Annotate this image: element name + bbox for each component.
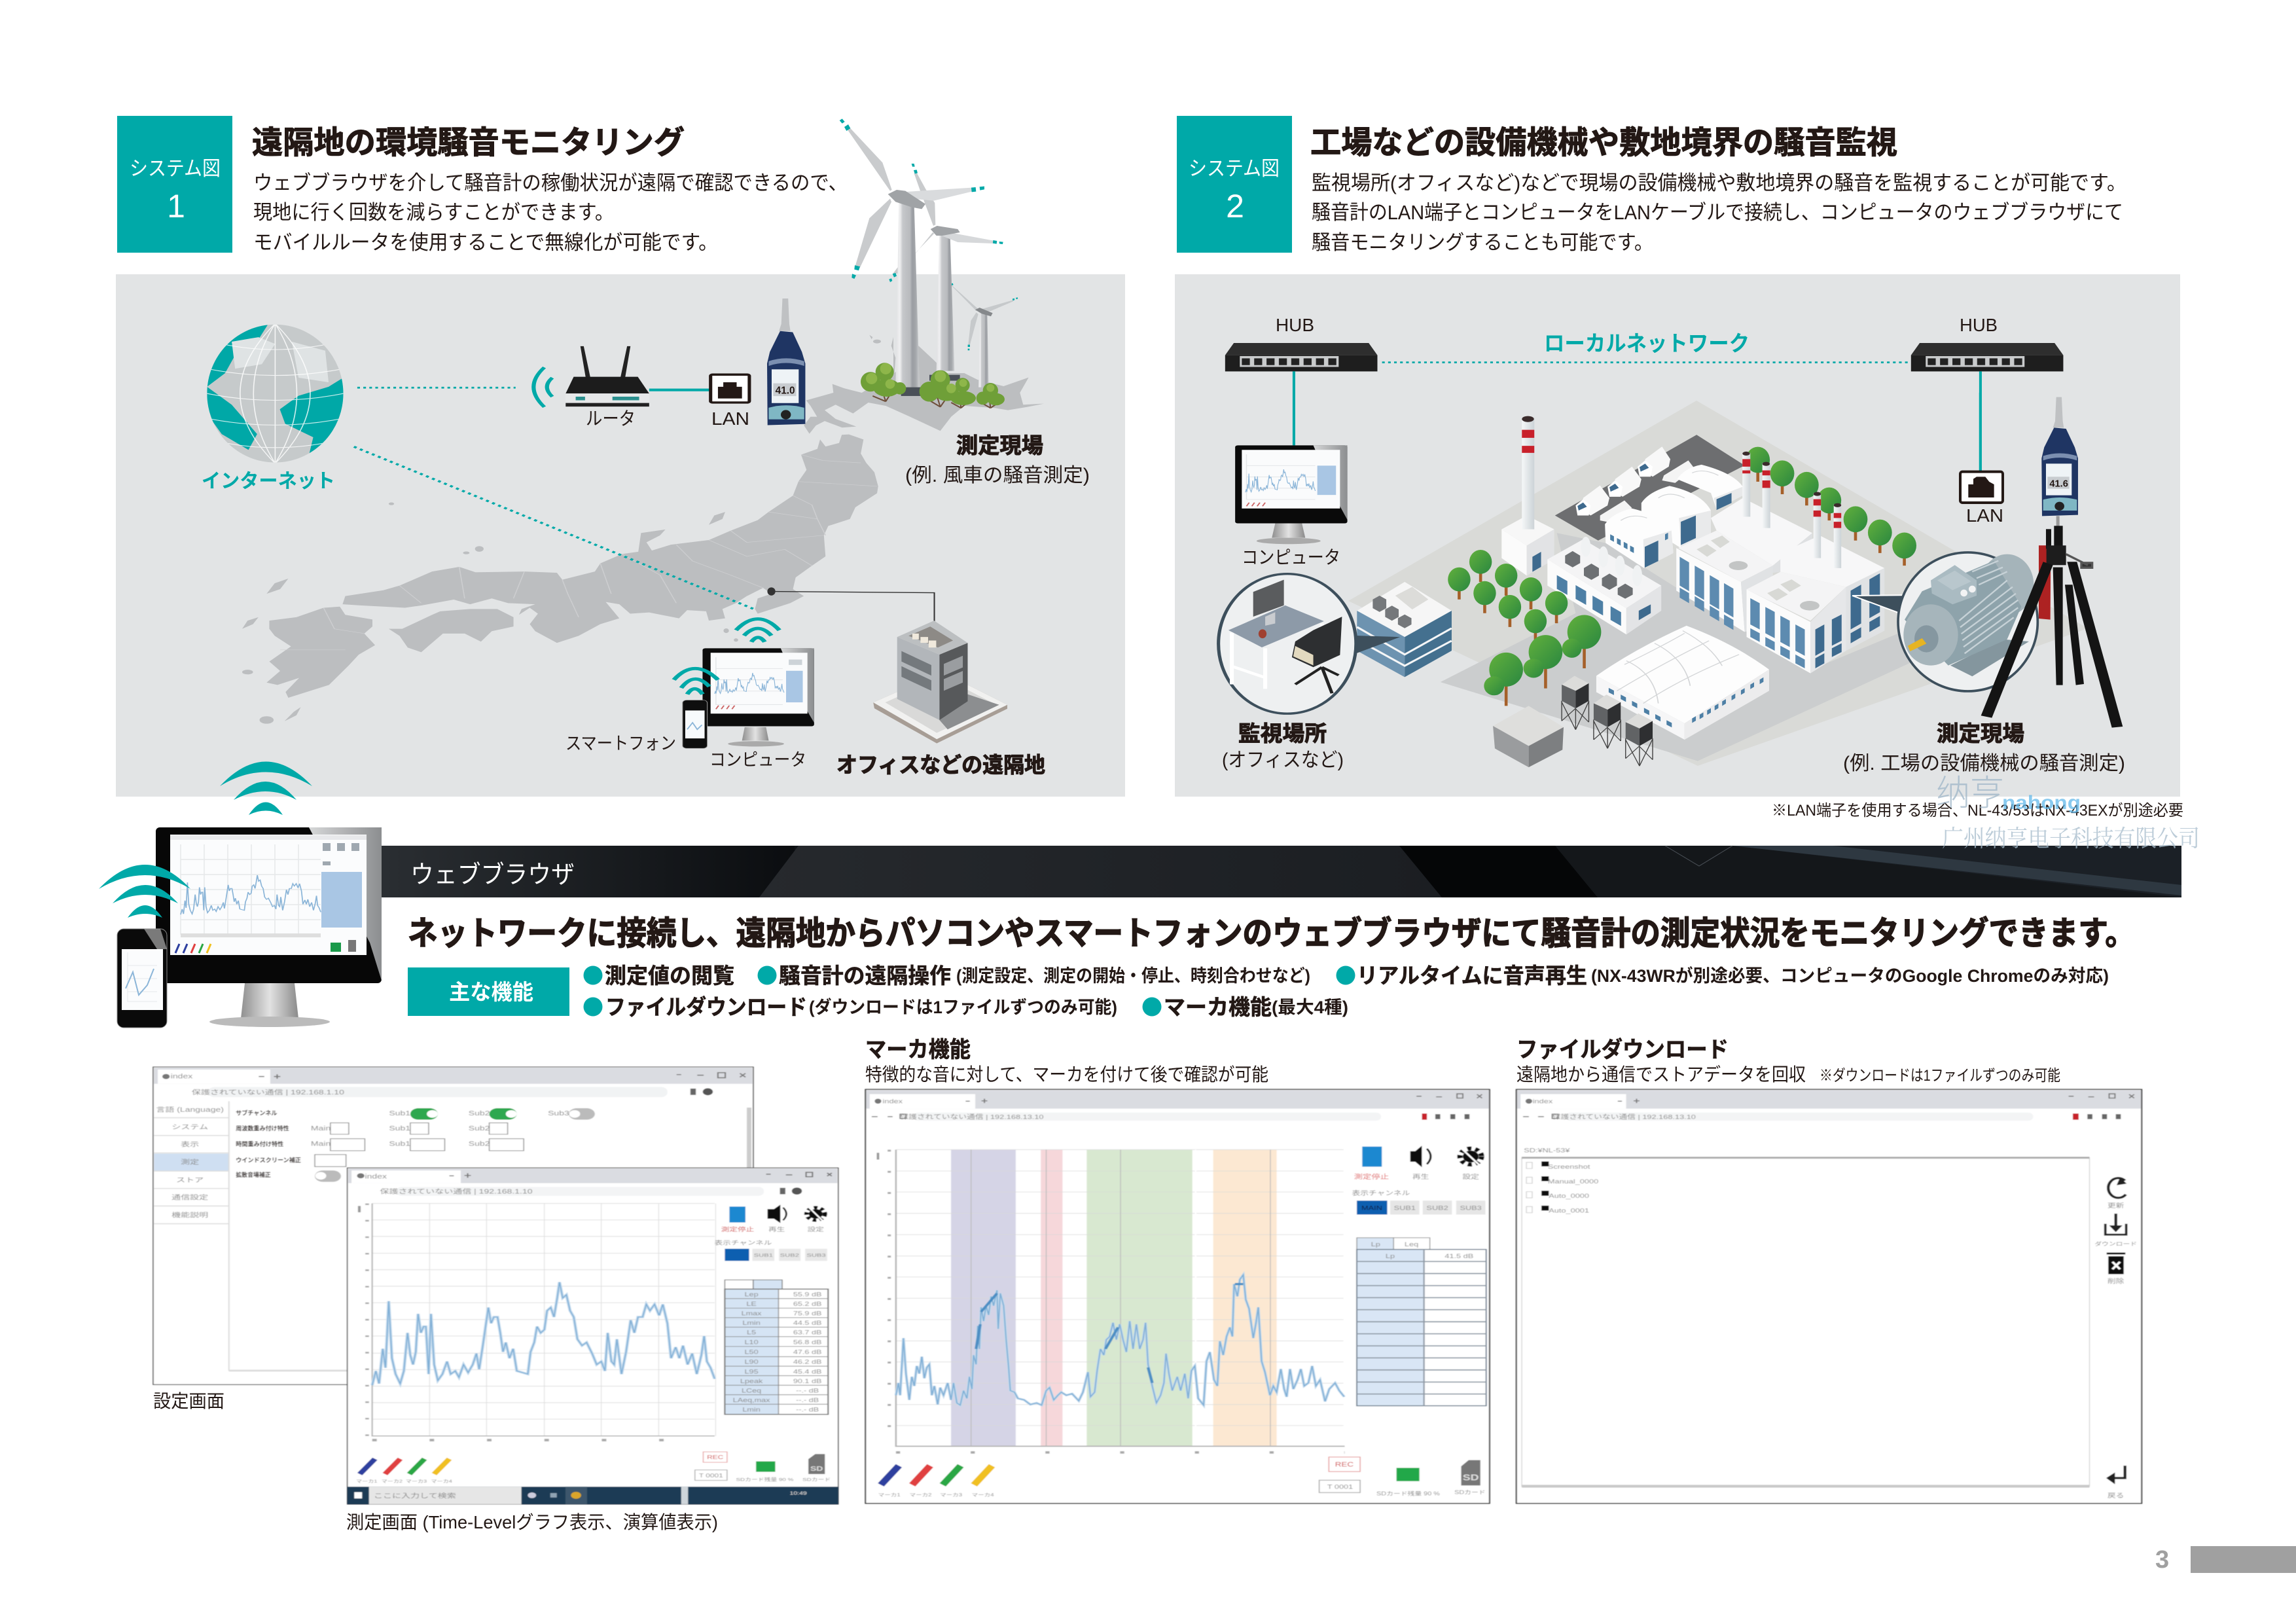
turbine 2: [889, 164, 1003, 381]
feature list: リアルタイムに音声再生: [1357, 964, 1587, 988]
watermark: [1936, 774, 2200, 852]
system 1 title: 遠隔地の環境騒音モニタリング: [252, 126, 685, 160]
callout: motor: [1852, 552, 2037, 691]
screenshot: settings window: Sub3: [548, 1110, 569, 1117]
system 2 number badge: [1177, 116, 1292, 253]
panel: system diagram 1: [116, 118, 1125, 797]
icon: monitor: [1235, 445, 1348, 544]
label: measurement site: (例. 風車の騒音測定): [905, 465, 1090, 486]
value table: 55.9 dB: [793, 1291, 821, 1298]
hubs and network line: [1225, 343, 2063, 471]
status icons: REC: [1335, 1461, 1354, 1468]
value table: --.- dB: [796, 1388, 819, 1394]
system 1 description: [253, 171, 848, 254]
screenshot: measurement window: 保護されていない通信 | 192.168.1.10: [380, 1187, 533, 1195]
page number: [2155, 1546, 2296, 1574]
japan map: [242, 335, 1044, 724]
screenshot: settings window: [153, 1067, 753, 1384]
windows taskbar: ここに入力して検索: [374, 1492, 456, 1500]
system 1 description: ウェブブラウザを介して騒音計の稼働状況が遠隔で確認できるので、: [253, 171, 848, 194]
controls: 測定停止: [1354, 1173, 1389, 1181]
status icons: SD: [810, 1465, 823, 1472]
screenshot: marker window: マーカ4: [972, 1492, 994, 1498]
file list: Auto_0001: [1549, 1208, 1589, 1214]
screenshot: settings window: Sub2: [469, 1125, 490, 1132]
label: local network: ローカルネットワーク: [1544, 331, 1749, 355]
screenshot: settings window: ストア: [176, 1176, 204, 1183]
main functions badge: 主な機能: [449, 980, 533, 1004]
controls: 設定: [1462, 1174, 1479, 1181]
value table: L5: [747, 1329, 756, 1336]
value table: 56.8 dB: [793, 1339, 821, 1346]
screenshot: settings window: ウインドスクリーン補正: [236, 1157, 301, 1164]
watermark: 纳亨: [1936, 774, 2004, 813]
block A: [1547, 537, 1661, 634]
screenshot: settings window: 測定: [181, 1159, 199, 1166]
block B rear: [1676, 530, 1773, 632]
feature list: 測定値の閲覧: [605, 964, 734, 988]
feature list: (ダウンロードは1ファイルずつのみ可能): [809, 997, 1117, 1017]
status icons: SDカード: [802, 1477, 831, 1482]
label: hub right: HUB: [1960, 315, 1998, 335]
windows taskbar: [348, 1487, 838, 1504]
screenshot: measurement window: [348, 1168, 838, 1504]
screenshot: measurement window: index: [365, 1173, 387, 1180]
system 2 number badge: システム図: [1189, 157, 1280, 180]
value table: 45.4 dB: [793, 1369, 821, 1375]
status icons: SDカード残量 90 %: [736, 1477, 794, 1482]
file list: Auto_0000: [1549, 1193, 1589, 1200]
screenshot: settings window: 周波数重み付け特性: [236, 1125, 289, 1132]
arched warehouses: [1605, 465, 1743, 568]
screenshot: settings window: 機能説明: [171, 1211, 208, 1219]
hub right: [1911, 343, 2063, 371]
heading: file download: ファイルダウンロード: [1516, 1037, 1729, 1062]
value table: LAeq,max: [733, 1398, 770, 1403]
main functions badge: [408, 967, 569, 1016]
connection lines: [354, 388, 935, 621]
value table: 75.9 dB: [793, 1310, 821, 1317]
illustration: factory site: [1348, 401, 2088, 767]
file action icons: [2094, 1178, 2137, 1499]
screenshot: settings window: Sub1: [389, 1110, 410, 1117]
turbine 3: [948, 281, 1018, 388]
value table: Lpeak: [740, 1379, 763, 1384]
value table: --.- dB: [796, 1398, 819, 1403]
feature list: マーカ機能: [1164, 995, 1272, 1019]
text: marker description: 特徴的な音に対して、マーカを付けて後で確認が可能: [865, 1064, 1268, 1085]
value table: Lep: [745, 1291, 759, 1298]
controls: SUB3: [1460, 1205, 1482, 1212]
small unit: [1493, 706, 1564, 767]
file list: Manual_0000: [1548, 1178, 1598, 1185]
file action icons: 更新: [2108, 1202, 2124, 1210]
trees: [1448, 550, 1601, 706]
value table: Leq: [1405, 1242, 1418, 1248]
caption: settings screen: 設定画面: [153, 1391, 224, 1411]
status icons: SDカード: [1454, 1490, 1486, 1496]
value table: 41.5 dB: [1444, 1253, 1473, 1260]
screenshot: settings window: サブチャンネル: [236, 1110, 278, 1117]
controls: 再生: [1412, 1173, 1429, 1181]
value table: 46.2 dB: [793, 1359, 821, 1365]
controls: SUB3: [806, 1252, 826, 1258]
screenshot: marker window: マーカ2: [910, 1492, 932, 1498]
time-level chart: [877, 1149, 1345, 1453]
screenshot: settings window: 言語 (Language): [156, 1106, 224, 1113]
label: measurement site: (例. 工場の設備機械の騒音測定): [1843, 753, 2125, 774]
screenshot: marker window: [865, 1089, 1490, 1504]
value table: 47.6 dB: [793, 1349, 821, 1356]
screenshot: settings window: Sub1: [389, 1140, 410, 1147]
controls: [1352, 1146, 1485, 1214]
hub left: [1225, 343, 1377, 371]
label: monitoring location: 監視場所: [1238, 721, 1327, 746]
watermark: 广州纳亨电子科技有限公司: [1942, 825, 2200, 852]
caption: measurement screen: 測定画面 (Time-Levelグラフ表示、演算値表示): [346, 1512, 718, 1532]
ground roads: [1441, 435, 1936, 761]
system 2 description: 騒音モニタリングすることも可能です。: [1312, 231, 1653, 254]
feature list: (測定設定、測定の開始・停止、時刻合わせなど): [956, 966, 1310, 986]
controls: SUB1: [754, 1252, 773, 1258]
screenshot: marker window: マーカ3: [940, 1492, 962, 1498]
note: LAN terminal: ※LAN端子を使用する場合、NL-43/53はNX-43EXが別途必要: [1772, 802, 2183, 820]
feature list: (最大4種): [1272, 998, 1348, 1017]
screenshot: measurement window: マーカ3: [406, 1479, 427, 1484]
controls: 再生: [768, 1225, 785, 1233]
label: smartphone: スマートフォン: [565, 734, 676, 753]
label: internet: インターネット: [202, 471, 335, 492]
icon: office building: [873, 621, 1007, 744]
controls: 測定停止: [721, 1225, 754, 1233]
file action icons: 戻る: [2108, 1492, 2124, 1499]
value table: Lmin: [742, 1407, 761, 1413]
rear tree row: [1746, 447, 1916, 566]
icon: large monitor: [156, 827, 382, 1027]
system 2 description: 騒音計のLAN端子とコンピュータをLANケーブルで接続し、コンピュータのウェブブラウザにて: [1312, 201, 2123, 224]
label: monitoring location: (オフィスなど): [1222, 749, 1344, 771]
screenshot: settings window: 拡散音場補正: [236, 1171, 271, 1179]
icon: router: [533, 346, 649, 407]
screenshot: settings window: 通信設定: [171, 1193, 208, 1201]
screenshot: file download window: SD:¥NL-53¥: [1524, 1147, 1570, 1154]
system 2 description: 監視場所(オフィスなど)などで現場の設備機械や敷地境界の騒音を監視することが可能です。: [1312, 171, 2126, 194]
status icons: REC: [707, 1455, 723, 1461]
controls: [714, 1204, 827, 1261]
bottom warehouse: [1596, 626, 1769, 740]
heading: marker function: マーカ機能: [865, 1038, 971, 1062]
label: router: ルータ: [586, 408, 636, 429]
value table: --.- dB: [796, 1407, 819, 1413]
controls: 表示チャンネル: [714, 1239, 772, 1246]
icon: computer and smartphone: [674, 619, 814, 748]
status icons: SDカード残量 90 %: [1376, 1490, 1440, 1497]
screenshot: marker window: 保護されていない通信 | 192.168.13.10: [900, 1113, 1044, 1121]
system 2 description: [1312, 171, 2126, 254]
marker ranges: [951, 1149, 1277, 1446]
screenshot: settings window: 表示: [181, 1141, 199, 1148]
screenshot: file download window: index: [1533, 1098, 1553, 1105]
icon: globe: [207, 323, 343, 463]
screenshot: marker window: マーカ1: [878, 1492, 901, 1498]
icon: wifi above monitor: [220, 762, 312, 815]
panel: system diagram 2: [1175, 274, 2180, 797]
label: measurement site: [905, 433, 1090, 486]
label: LAN: LAN: [711, 408, 749, 429]
screenshot: file download window: [1516, 1089, 2142, 1504]
screenshot: settings window: Sub2: [469, 1140, 490, 1147]
feature list: (NX-43WRが別途必要、コンピュータのGoogle Chromeのみ対応): [1591, 965, 2109, 986]
controls: MAIN: [1361, 1205, 1382, 1212]
windows taskbar: 10:49: [789, 1490, 807, 1496]
label: measurement site: 測定現場: [956, 433, 1043, 458]
icon: sound level meter: 41.0: [776, 385, 795, 397]
text: file download description: 遠隔地から通信でストアデータを回収: [1516, 1064, 1806, 1085]
controls: SUB1: [1394, 1205, 1416, 1212]
controls: 表示チャンネル: [1352, 1189, 1410, 1197]
screenshot: settings window: Main: [311, 1140, 331, 1147]
value table: [1357, 1238, 1486, 1406]
icon: LAN port: [711, 374, 749, 403]
section band: web browser: ウェブブラウザ: [410, 861, 575, 889]
file action icons: 削除: [2108, 1277, 2124, 1285]
rear high block: [1711, 498, 1812, 573]
system 1 description: モバイルルータを使用することで無線化が可能です。: [253, 231, 718, 254]
screenshot: settings window: システム: [171, 1123, 208, 1130]
turbine 1: [840, 118, 984, 396]
value table: Lmax: [742, 1310, 762, 1317]
label: computer: コンピュータ: [1242, 547, 1340, 568]
marker pens: [881, 1466, 992, 1485]
screenshot: settings window: index: [171, 1073, 192, 1080]
screenshot: file download window: 保護されていない通信 | 192.168.13.10: [1552, 1113, 1696, 1121]
value table: L90: [745, 1359, 759, 1365]
label: measurement site: [1843, 721, 2125, 774]
value table: 65.2 dB: [793, 1301, 821, 1307]
value table: 44.5 dB: [793, 1320, 821, 1327]
callout: office desk: [1219, 574, 1400, 713]
label: measurement site: 測定現場: [1937, 721, 2024, 746]
marker pens: [360, 1459, 449, 1474]
page number: 3: [2155, 1546, 2169, 1574]
screenshot: measurement window: マーカ4: [431, 1479, 453, 1484]
icon: LAN port: [1960, 393, 2003, 503]
label: hub left: HUB: [1276, 315, 1314, 335]
system 2 number badge: 2: [1226, 188, 1244, 225]
block B front: [1747, 572, 1846, 674]
icon: meter on tripod: 41.6: [2049, 478, 2068, 489]
screenshot: settings window: 保護されていない通信 | 192.168.1.10: [192, 1089, 344, 1096]
screenshot: settings window: Main: [311, 1125, 331, 1132]
red striped stacks: [1742, 452, 1841, 568]
icon: meter on tripod: [1981, 397, 2123, 728]
feature list: [584, 964, 2109, 1019]
file list: [1522, 1157, 2089, 1488]
text: file download description: [1516, 1064, 2060, 1085]
controls: SUB2: [1426, 1205, 1448, 1212]
feature list: 騒音計の遠隔操作: [779, 964, 951, 988]
feature list: ファイルダウンロード: [605, 995, 807, 1019]
icon: smartphone: [117, 929, 167, 1028]
system 2 title: 工場などの設備機械や敷地境界の騒音監視: [1310, 126, 1897, 160]
water towers: [1562, 676, 1653, 766]
value table: 63.7 dB: [793, 1329, 821, 1336]
label: monitoring location: [1222, 721, 1344, 771]
status icons: [695, 1452, 831, 1482]
section band: web browser: [382, 846, 2181, 897]
value table: L95: [745, 1369, 759, 1375]
value table: L10: [745, 1339, 759, 1346]
label: LAN: LAN: [1966, 505, 2003, 526]
system 1 number badge: システム図: [130, 157, 221, 180]
value table: L50: [745, 1349, 759, 1356]
value table: Lp: [1371, 1242, 1380, 1248]
status icons: T 0001: [699, 1473, 723, 1479]
screenshot: measurement window: マーカ2: [382, 1479, 403, 1484]
screenshot: settings window: Sub1: [389, 1125, 410, 1132]
status icons: [1319, 1457, 1486, 1497]
illustration: wind turbines: [840, 118, 1018, 408]
headline: ネットワークに接続し、遠隔地からパソコンやスマートフォンのウェブブラウザにて騒音計の測定状況をモニタリングできます。: [408, 915, 2135, 952]
system 1 number badge: [117, 116, 232, 253]
screenshot: marker window: index: [883, 1098, 903, 1105]
value table: Lmin: [742, 1320, 761, 1327]
system 1 description: 現地に行く回数を減らすことができます。: [253, 201, 614, 224]
text: file download description: ※ダウンロードは1ファイルずつのみ可能: [1820, 1067, 2060, 1085]
system 1 number badge: 1: [167, 188, 185, 225]
trees: [861, 363, 1005, 408]
icon: wifi beside monitor: [99, 865, 190, 918]
trucks: [1575, 446, 1694, 523]
controls: 設定: [808, 1226, 824, 1233]
status icons: T 0001: [1327, 1484, 1353, 1490]
watermark: nahong: [2002, 792, 2081, 814]
label: remote office: オフィスなどの遠隔地: [836, 753, 1045, 777]
front high block: [1780, 535, 1884, 651]
file action icons: ダウンロード: [2094, 1241, 2137, 1248]
left office building: [1357, 582, 1452, 677]
status icons: SD: [1463, 1473, 1479, 1483]
screenshot: settings window: 時間重み付け特性: [236, 1140, 284, 1148]
value table: [725, 1280, 828, 1415]
screenshot: settings window: Sub2: [469, 1110, 490, 1117]
file list: Screenshot: [1548, 1164, 1590, 1170]
value table: LCeq: [742, 1388, 761, 1394]
chimney and boiler house: [1501, 416, 1554, 575]
icon: sound level meter: [767, 298, 805, 425]
value table: LE: [746, 1301, 757, 1307]
value table: 90.1 dB: [793, 1379, 821, 1384]
time-level chart: [358, 1203, 715, 1440]
label: computer: コンピュータ: [709, 750, 806, 770]
controls: SUB2: [780, 1252, 799, 1258]
screenshot: measurement window: マーカ1: [356, 1479, 377, 1484]
value table: Lp: [1386, 1253, 1395, 1260]
